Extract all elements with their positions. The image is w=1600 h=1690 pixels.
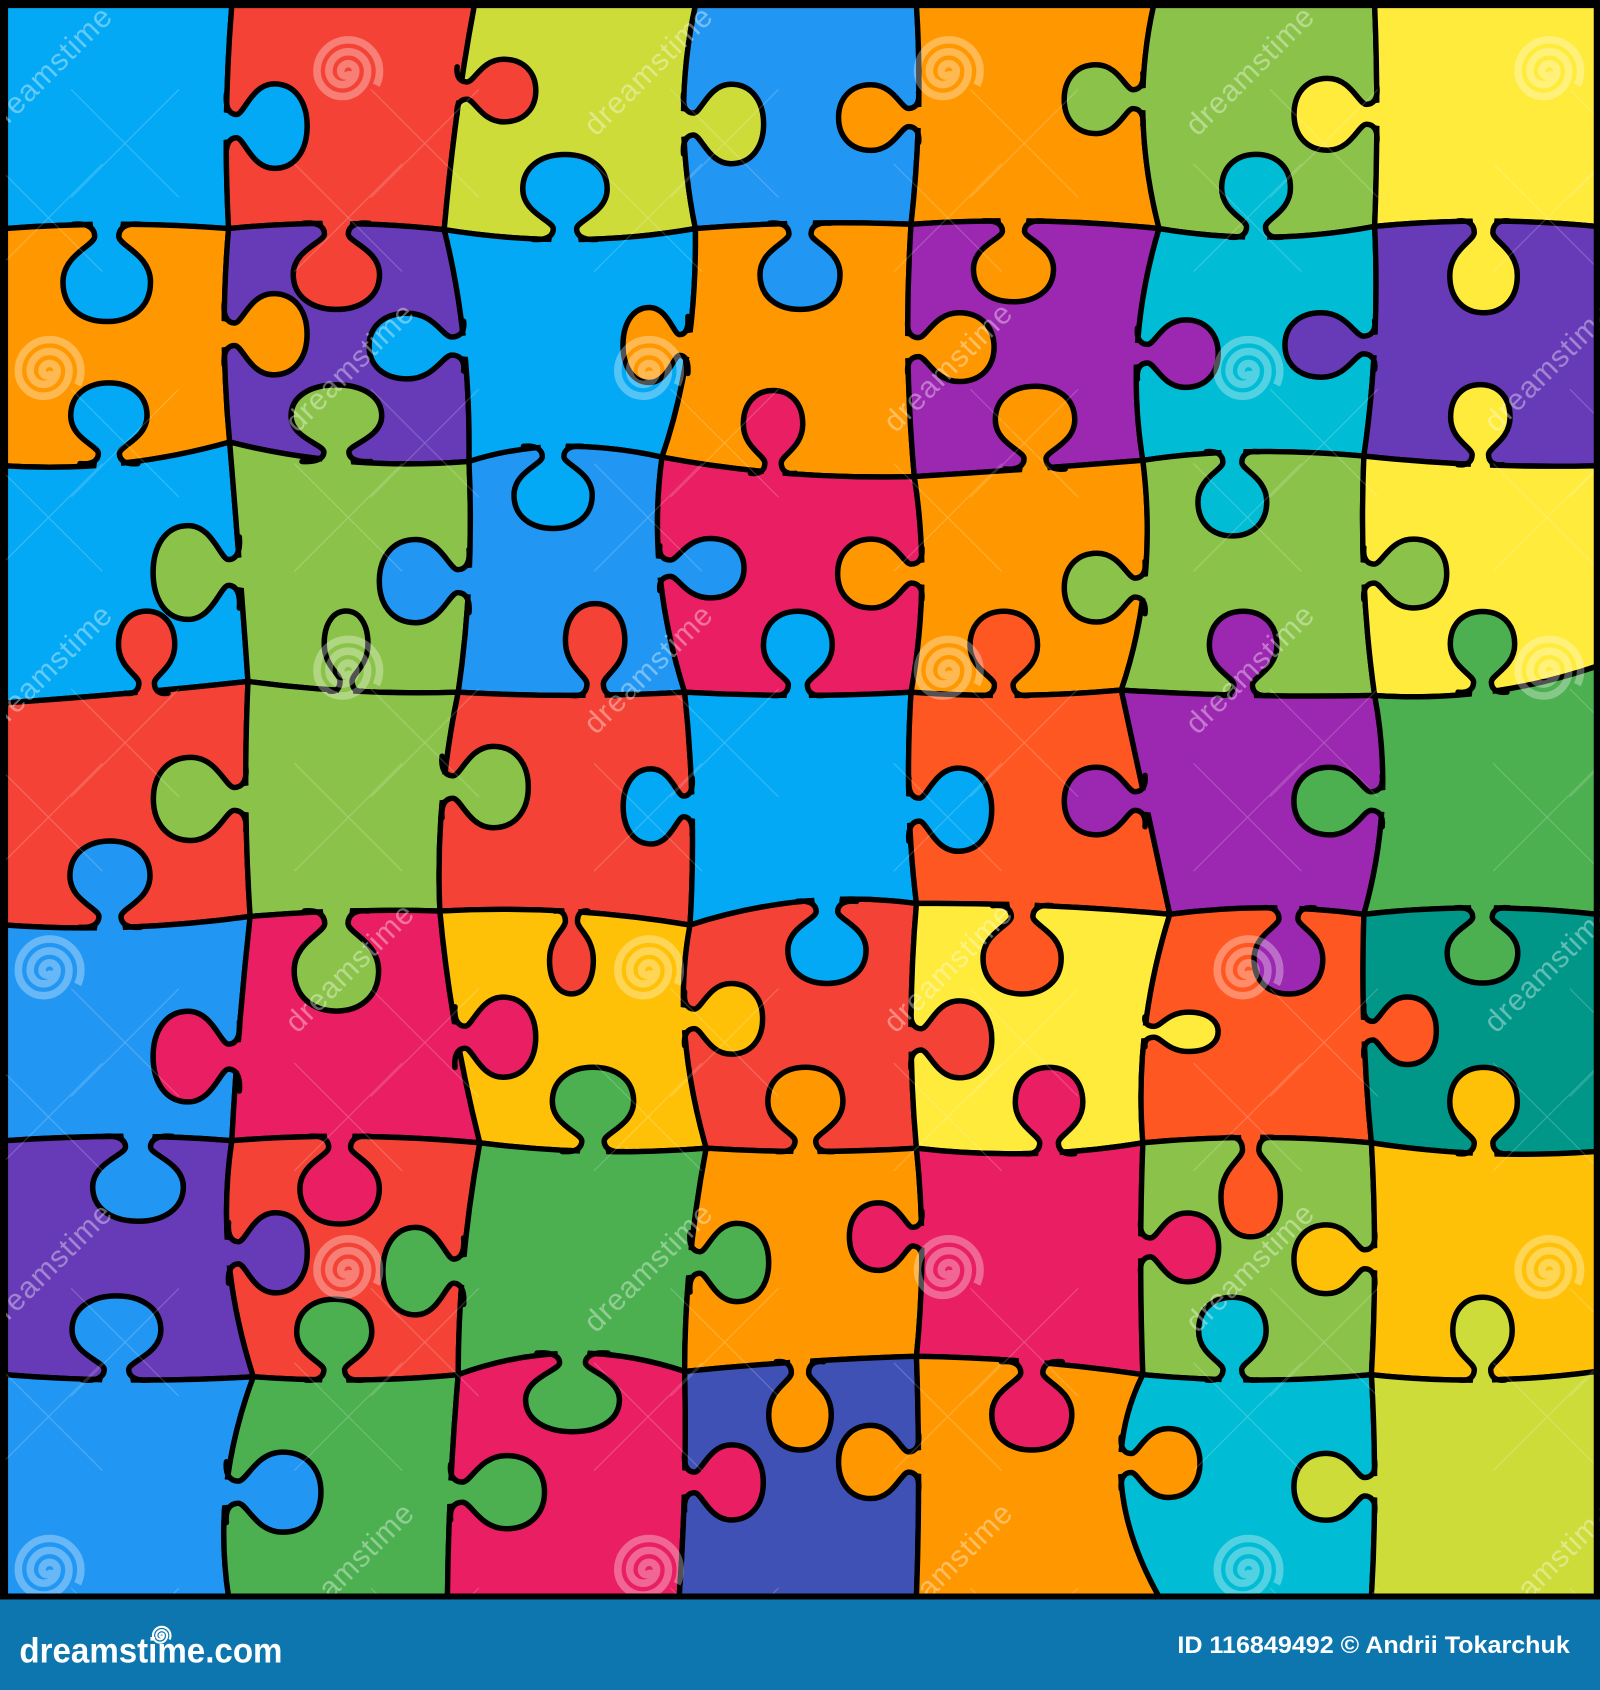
watermark: diagonal dreamstime text: dreamstime (279, 296, 421, 439)
piece: light green (1141, 1137, 1375, 1380)
watermark: diagonal dreamstime text: dreamstime (578, 598, 720, 740)
piece: pink (916, 1143, 1143, 1375)
interlocking tabs: row 6 (221, 1203, 1382, 1315)
piece: pink (657, 457, 922, 695)
piece: cyan (1121, 1375, 1375, 1597)
piece: orange (911, 5, 1159, 229)
interlocking tabs: between rows 2 and 3 (71, 383, 1510, 536)
piece: yellow (911, 903, 1170, 1154)
piece: deep purple (224, 223, 469, 464)
piece: red (5, 681, 250, 928)
interlocking tabs: row 3 (153, 526, 1447, 623)
piece: light green (230, 442, 470, 693)
puzzle pieces row 6 (5, 1136, 1597, 1380)
piece: blue (5, 916, 250, 1141)
watermark: diagonal dreamstime text: dreamstime (1179, 0, 1322, 142)
piece: pink (447, 1353, 685, 1597)
piece: light blue (685, 692, 916, 925)
puzzle pieces row 4 (5, 666, 1597, 928)
piece: blue (684, 5, 919, 229)
piece: blue (458, 446, 685, 695)
piece: light blue (5, 442, 248, 703)
watermark: diagonal dreamstime text: dreamstime (279, 1496, 421, 1639)
puzzle pieces row 5 (5, 899, 1597, 1154)
piece: red (226, 5, 474, 230)
puzzle pieces row 7 (5, 1353, 1597, 1597)
piece: red (439, 692, 693, 925)
piece: light green (1143, 5, 1377, 237)
piece: deep purple (1364, 221, 1597, 466)
watermark: diagonal dreamstime text: dreamstime (578, 1196, 720, 1339)
footer bar (0, 1599, 1600, 1690)
piece: orange (685, 1148, 922, 1371)
piece: deep orange (909, 690, 1170, 914)
piece: orange (911, 460, 1147, 695)
piece: deep orange (1141, 908, 1371, 1143)
piece: orange (5, 224, 230, 467)
piece: light green (1121, 452, 1375, 696)
watermark: diagonal dreamstime text: dreamstime (877, 1496, 1020, 1639)
watermark: diagonal dreamstime text: dreamstime (877, 897, 1020, 1039)
puzzle pieces row 3 (5, 442, 1597, 703)
piece: red (226, 1136, 480, 1380)
piece: lime (1371, 1371, 1597, 1597)
piece: purple (908, 221, 1159, 477)
piece: light blue (444, 229, 695, 461)
watermark: diagonal dreamstime text: dreamstime (578, 0, 720, 142)
footer image credit: ID 116849492 © Andrii Tokarchuk (1177, 1633, 1571, 1659)
piece: orange (662, 223, 914, 477)
interlocking tabs: row 4 (153, 746, 1390, 851)
piece: light blue (5, 5, 232, 229)
puzzle pieces row 1 (5, 5, 1597, 240)
piece: amber (440, 909, 706, 1152)
piece: green (1364, 666, 1597, 914)
piece: amber (1371, 1143, 1597, 1380)
piece: pink (232, 910, 480, 1143)
piece: teal (1363, 908, 1597, 1154)
piece: blue (5, 1375, 253, 1597)
interlocking tabs: between rows 3 and 4 (118, 604, 1515, 704)
piece: orange (916, 1356, 1159, 1597)
footer logo: dreamstime.com: dreamstime.com (19, 1631, 282, 1671)
interlocking tabs: row 7 (218, 1425, 1382, 1532)
piece: yellow (1363, 456, 1597, 697)
piece: yellow (1375, 5, 1597, 226)
watermark: diagonal dreamstime text: dreamstime (877, 296, 1020, 439)
piece: light green (246, 681, 458, 916)
piece: cyan (1136, 226, 1376, 460)
interlocking tabs: between rows 5 and 6 (93, 1067, 1517, 1237)
piece: green (224, 1375, 458, 1597)
watermark: diagonal dreamstime text: dreamstime (1179, 598, 1322, 740)
piece: deep purple (5, 1136, 253, 1380)
piece: lime (444, 5, 695, 240)
interlocking tabs: row 1 (219, 59, 1385, 168)
piece: red (683, 899, 916, 1151)
interlocking tabs: between rows 1 and 2 (63, 154, 1517, 322)
interlocking tabs: row 5 (153, 984, 1436, 1102)
puzzle pieces row 2 (5, 221, 1597, 477)
watermark: diagonal dreamstime text: dreamstime (1179, 1196, 1322, 1339)
interlocking tabs: row 2 (216, 294, 1383, 387)
piece: indigo (679, 1356, 919, 1597)
interlocking tabs: between rows 6 and 7 (72, 1296, 1512, 1450)
piece: purple (1121, 690, 1383, 914)
interlocking tabs: between rows 4 and 5 (70, 841, 1518, 1011)
watermark: diagonal dreamstime text: dreamstime (279, 897, 421, 1039)
piece: green (458, 1143, 706, 1375)
